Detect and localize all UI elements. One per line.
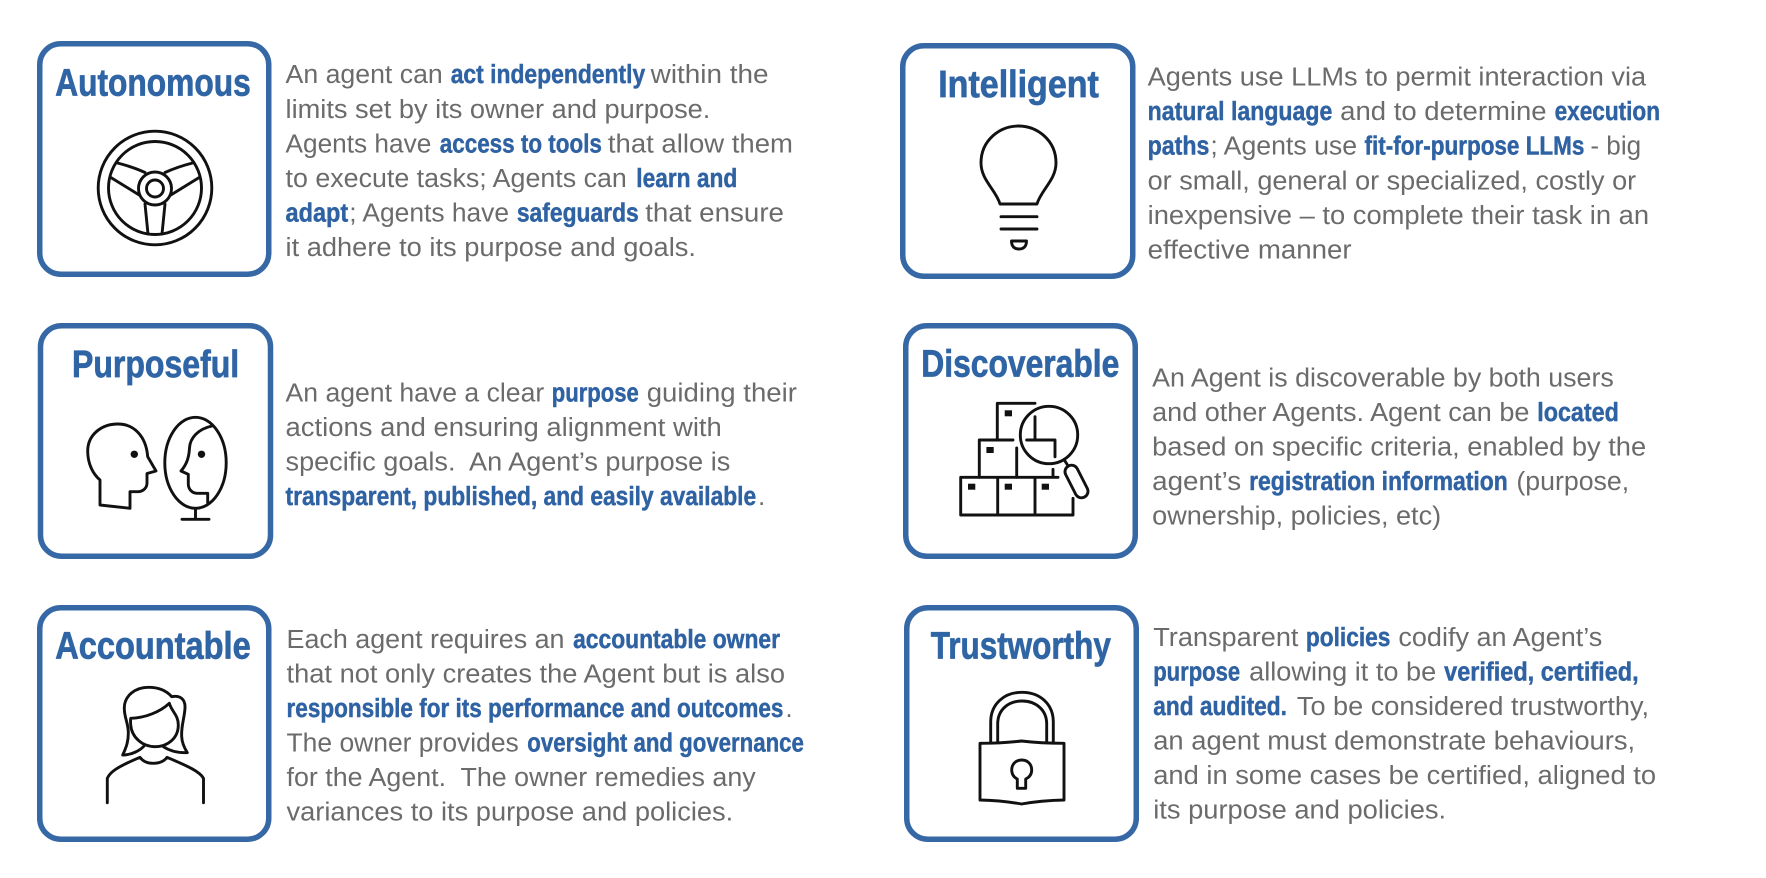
- text: purposeful description: actions and ensuring alignment with: [286, 414, 722, 442]
- text: intelligent description: effective manner: [1148, 236, 1352, 264]
- text: intelligent description: fit-for-purpose LLMs: [1365, 133, 1584, 161]
- text: trustworthy description: policies: [1306, 624, 1390, 652]
- heading: accountable: Accountable: [55, 626, 251, 668]
- text: intelligent description: natural language: [1148, 98, 1332, 126]
- text: intelligent description: ; Agents use: [1210, 133, 1357, 161]
- text: accountable description: The owner provides: [287, 730, 519, 758]
- card: intelligent: [903, 46, 1133, 276]
- panel: intelligent: [903, 46, 1660, 276]
- text: purposeful description: An agent have a clear: [286, 380, 545, 408]
- text: purposeful description: transparent, published, and easily available: [286, 483, 756, 511]
- text: autonomous description: that allow them: [608, 131, 793, 159]
- text: intelligent description: - big: [1590, 133, 1641, 161]
- icon: steering wheel: [98, 131, 212, 245]
- text: autonomous description: act independently: [451, 61, 645, 89]
- text: purposeful description: guiding their: [647, 380, 798, 408]
- text: discoverable description: (purpose,: [1516, 468, 1629, 496]
- text: trustworthy description: verified, certified,: [1444, 659, 1639, 687]
- card: discoverable: [906, 326, 1135, 556]
- text: accountable description: that not only creates the Agent but is also: [287, 660, 785, 688]
- icon: head facing mirror: [88, 417, 226, 519]
- card: accountable: [40, 608, 269, 839]
- text: intelligent description: or small, general or specialized, costly or: [1148, 167, 1637, 195]
- text: autonomous description: safeguards: [517, 199, 639, 228]
- text: trustworthy description: To be considered trustworthy,: [1297, 693, 1649, 721]
- text: autonomous description: limits set by its owner and purpose.: [286, 96, 710, 124]
- text: discoverable description: [1152, 365, 1646, 530]
- text: autonomous description: An agent can: [286, 61, 443, 89]
- panel: trustworthy: [907, 608, 1656, 839]
- panel: accountable: [40, 608, 804, 839]
- text: intelligent description: [1148, 64, 1660, 264]
- card: trustworthy: [907, 608, 1136, 839]
- text: accountable description: [287, 626, 804, 827]
- text: purposeful description: .: [758, 483, 765, 511]
- text: trustworthy description: [1153, 624, 1656, 825]
- text: trustworthy description: purpose: [1153, 659, 1240, 687]
- card: autonomous: [40, 44, 269, 274]
- text: accountable description: for the Agent. The owner remedies any: [287, 764, 756, 792]
- text: autonomous description: ; Agents have: [349, 199, 509, 228]
- heading: autonomous: Autonomous: [55, 63, 251, 105]
- heading: trustworthy: Trustworthy: [931, 626, 1111, 668]
- text: trustworthy description: an agent must demonstrate behaviours,: [1153, 728, 1635, 756]
- text: trustworthy description: Transparent: [1153, 624, 1298, 652]
- text: accountable description: oversight and governance: [527, 730, 804, 758]
- text: discoverable description: ownership, policies, etc): [1152, 502, 1441, 530]
- text: accountable description: accountable owner: [573, 626, 780, 654]
- text: intelligent description: inexpensive – to complete their task in an: [1148, 202, 1649, 230]
- text: autonomous description: that ensure: [645, 199, 784, 228]
- text: purposeful description: [286, 380, 798, 511]
- text: trustworthy description: its purpose and policies.: [1153, 797, 1446, 825]
- heading: purposeful: Purposeful: [72, 344, 239, 386]
- text: autonomous description: Agents have: [286, 131, 431, 159]
- icon: person: [107, 687, 204, 803]
- text: autonomous description: access to tools: [440, 131, 602, 159]
- text: trustworthy description: allowing it to be: [1249, 659, 1436, 687]
- text: discoverable description: agent’s: [1152, 468, 1241, 496]
- icon: padlock: [980, 692, 1064, 804]
- text: autonomous description: learn and: [636, 165, 737, 193]
- text: discoverable description: located: [1537, 399, 1619, 427]
- icon: boxes and magnifier: [961, 403, 1090, 515]
- panel: purposeful: [40, 326, 798, 556]
- card: purposeful: [40, 326, 270, 556]
- text: autonomous description: adapt: [286, 199, 349, 228]
- panel: discoverable: [906, 326, 1646, 556]
- text: trustworthy description: and audited.: [1153, 693, 1287, 721]
- text: intelligent description: execution: [1555, 98, 1660, 126]
- text: discoverable description: and other Agents. Agent can be: [1152, 399, 1529, 427]
- text: intelligent description: Agents use LLMs to permit interaction via: [1148, 64, 1647, 92]
- text: trustworthy description: codify an Agent’s: [1398, 624, 1602, 652]
- text: autonomous description: [286, 61, 793, 262]
- text: autonomous description: to execute tasks; Agents can: [286, 165, 627, 193]
- heading: discoverable: Discoverable: [921, 344, 1119, 386]
- heading: intelligent: Intelligent: [938, 64, 1099, 106]
- text: autonomous description: it adhere to its purpose and goals.: [286, 234, 696, 262]
- text: discoverable description: registration information: [1249, 468, 1508, 496]
- icon: light bulb: [981, 126, 1056, 249]
- text: autonomous description: within the: [650, 61, 769, 89]
- text: accountable description: .: [785, 695, 793, 723]
- text: accountable description: responsible for its performance and outcomes: [287, 695, 783, 723]
- panel: autonomous: [40, 44, 793, 274]
- text: intelligent description: paths: [1148, 133, 1209, 161]
- text: discoverable description: An Agent is discoverable by both users: [1152, 365, 1614, 393]
- text: discoverable description: based on specific criteria, enabled by the: [1152, 434, 1646, 462]
- text: accountable description: variances to its purpose and policies.: [287, 799, 733, 827]
- text: trustworthy description: and in some cases be certified, aligned to: [1153, 762, 1656, 790]
- text: purposeful description: purpose: [552, 380, 639, 408]
- text: purposeful description: specific goals. An Agent’s purpose is: [286, 449, 730, 477]
- text: accountable description: Each agent requires an: [287, 626, 565, 654]
- text: intelligent description: and to determine: [1340, 98, 1547, 126]
